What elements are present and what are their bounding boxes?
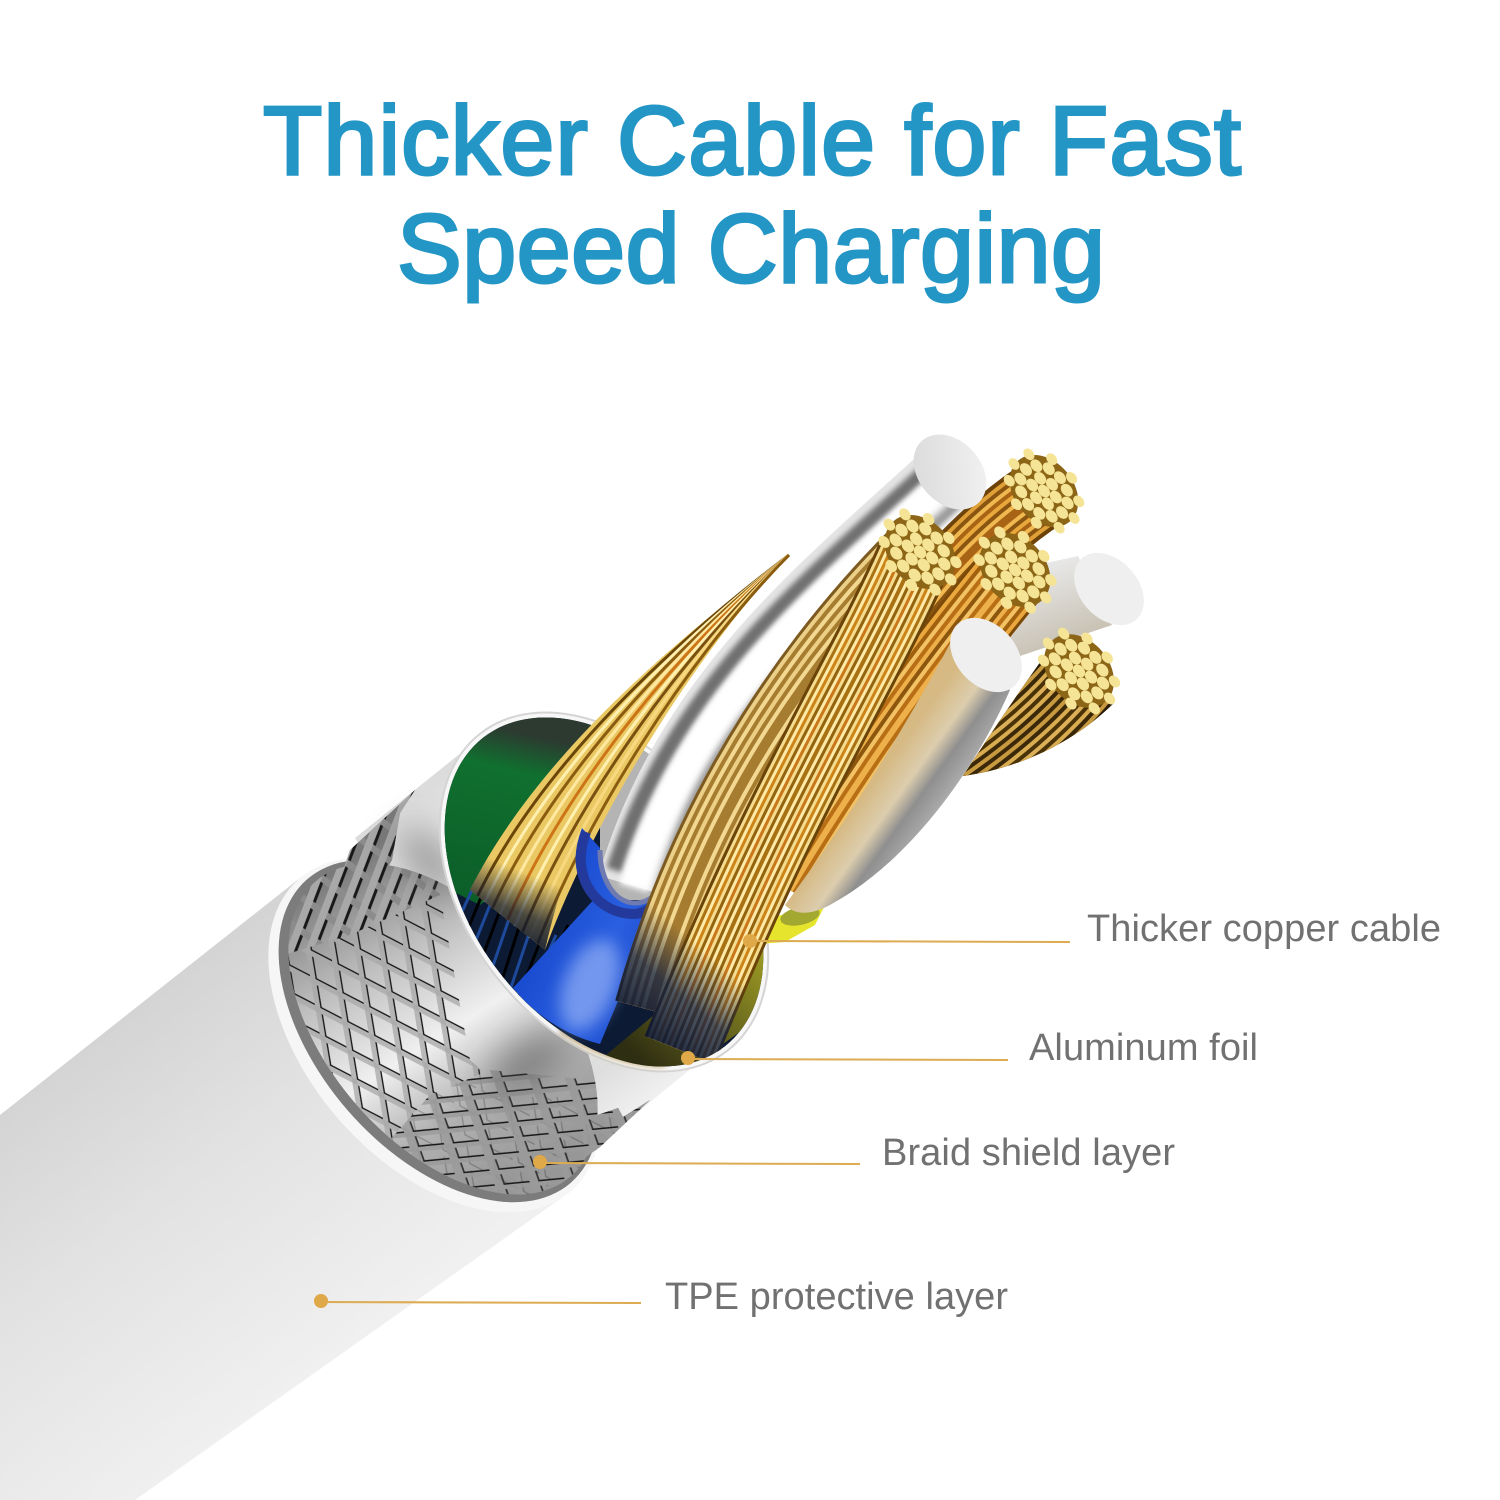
- gray insulated wire front: [785, 640, 1010, 913]
- cable interior: [444, 718, 764, 1066]
- copper strand bundle middle: [790, 572, 1014, 890]
- wire end caps: [899, 420, 1158, 706]
- TPE protective outer sheath: [0, 878, 570, 1500]
- copper strand bundle front: [680, 560, 913, 1050]
- callout: thicker copper cable: Thicker copper cable: [1087, 908, 1441, 950]
- callout: braid shield layer: Braid shield layer: [882, 1132, 1175, 1174]
- aluminum foil front rim: [372, 649, 836, 1135]
- cable illustration: [0, 420, 1158, 1500]
- title: Thicker Cable for Fast: [263, 86, 1241, 195]
- copper strand bundle top: [870, 492, 1045, 680]
- insulated wire right: [1000, 556, 1112, 658]
- copper strand end clusters: [862, 433, 1136, 730]
- blue insulation sleeve: [513, 828, 670, 1044]
- white insulated wire: [614, 466, 962, 892]
- callout: aluminum foil: Aluminum foil: [1029, 1027, 1258, 1069]
- yellow insulated wire base: [745, 903, 825, 945]
- braid shield ring: [268, 754, 690, 1208]
- copper strand bundle right: [950, 676, 1082, 790]
- callout: TPE protective layer: TPE protective layer: [665, 1276, 1008, 1318]
- title: [263, 86, 1241, 303]
- callout: aluminum foil: [681, 1027, 1258, 1069]
- copper strand bundle back twist: [650, 555, 915, 1010]
- title: Speed Charging: [397, 194, 1105, 303]
- callout: thicker copper cable: [743, 908, 1441, 950]
- copper strand bundle far left: [470, 555, 789, 950]
- callout: TPE protective layer: [314, 1276, 1008, 1318]
- callout: braid shield layer: [533, 1132, 1175, 1174]
